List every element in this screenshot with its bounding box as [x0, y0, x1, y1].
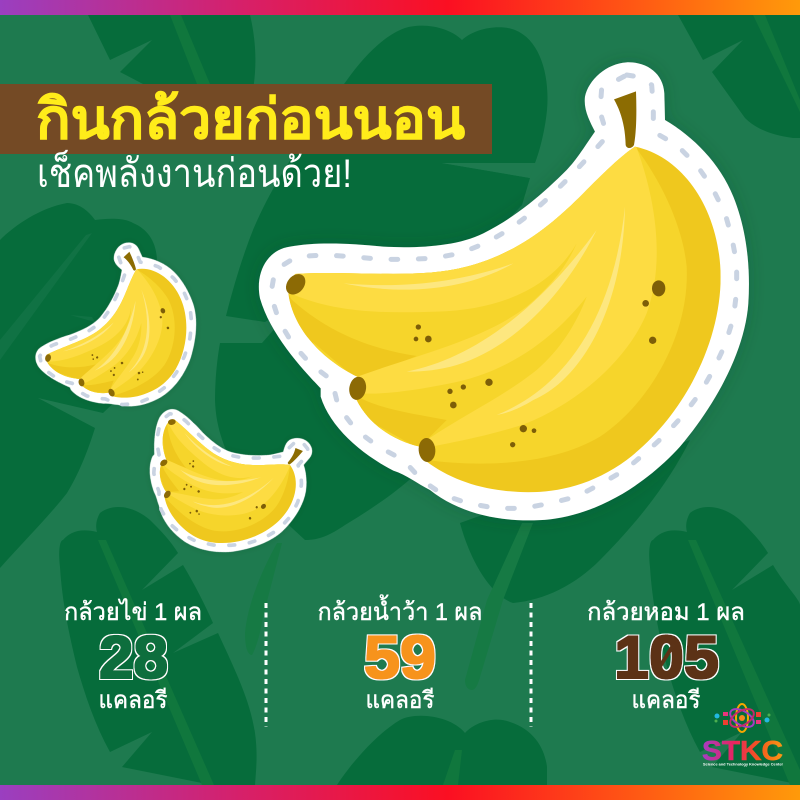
stat: egg banana calories: [64, 598, 202, 714]
number 59: 59: [364, 624, 436, 691]
icon: small banana bunch sticker, upper left: [7, 228, 222, 437]
stat: hom banana calories: [587, 599, 745, 714]
title banner: [0, 84, 492, 154]
logo atom icon: [714, 704, 770, 732]
label: egg banana: กล้วยไข่ 1 ผล: [64, 598, 202, 626]
top gradient bar: [0, 0, 800, 15]
logo tagline: Science and Technology Knowledge Center: [703, 762, 783, 766]
logo wordmark: STKC: [702, 735, 783, 766]
title: กินกล้วยก่อนนอน: [36, 88, 465, 150]
divider right: [530, 603, 532, 727]
bottom gradient bar: [0, 785, 800, 800]
divider left: [264, 603, 268, 727]
subtitle: เช็คพลังงานก่อนด้วย!: [37, 149, 352, 196]
stat: nam wa banana calories: [318, 594, 482, 714]
unit: แคลอรี: [632, 687, 701, 714]
label: hom banana: กล้วยหอม 1 ผล: [587, 599, 745, 626]
logo: STKC: [702, 704, 783, 766]
number 105: 105: [614, 624, 719, 691]
icon: large banana bunch sticker: [259, 62, 749, 520]
number 28: 28: [99, 624, 168, 691]
unit: แคลอรี: [366, 687, 435, 714]
icon: small banana bunch sticker, lower: [108, 357, 338, 586]
label: nam wa banana: กล้วยน้ำว้า 1 ผล: [318, 594, 482, 626]
unit: แคลอรี: [98, 687, 168, 714]
